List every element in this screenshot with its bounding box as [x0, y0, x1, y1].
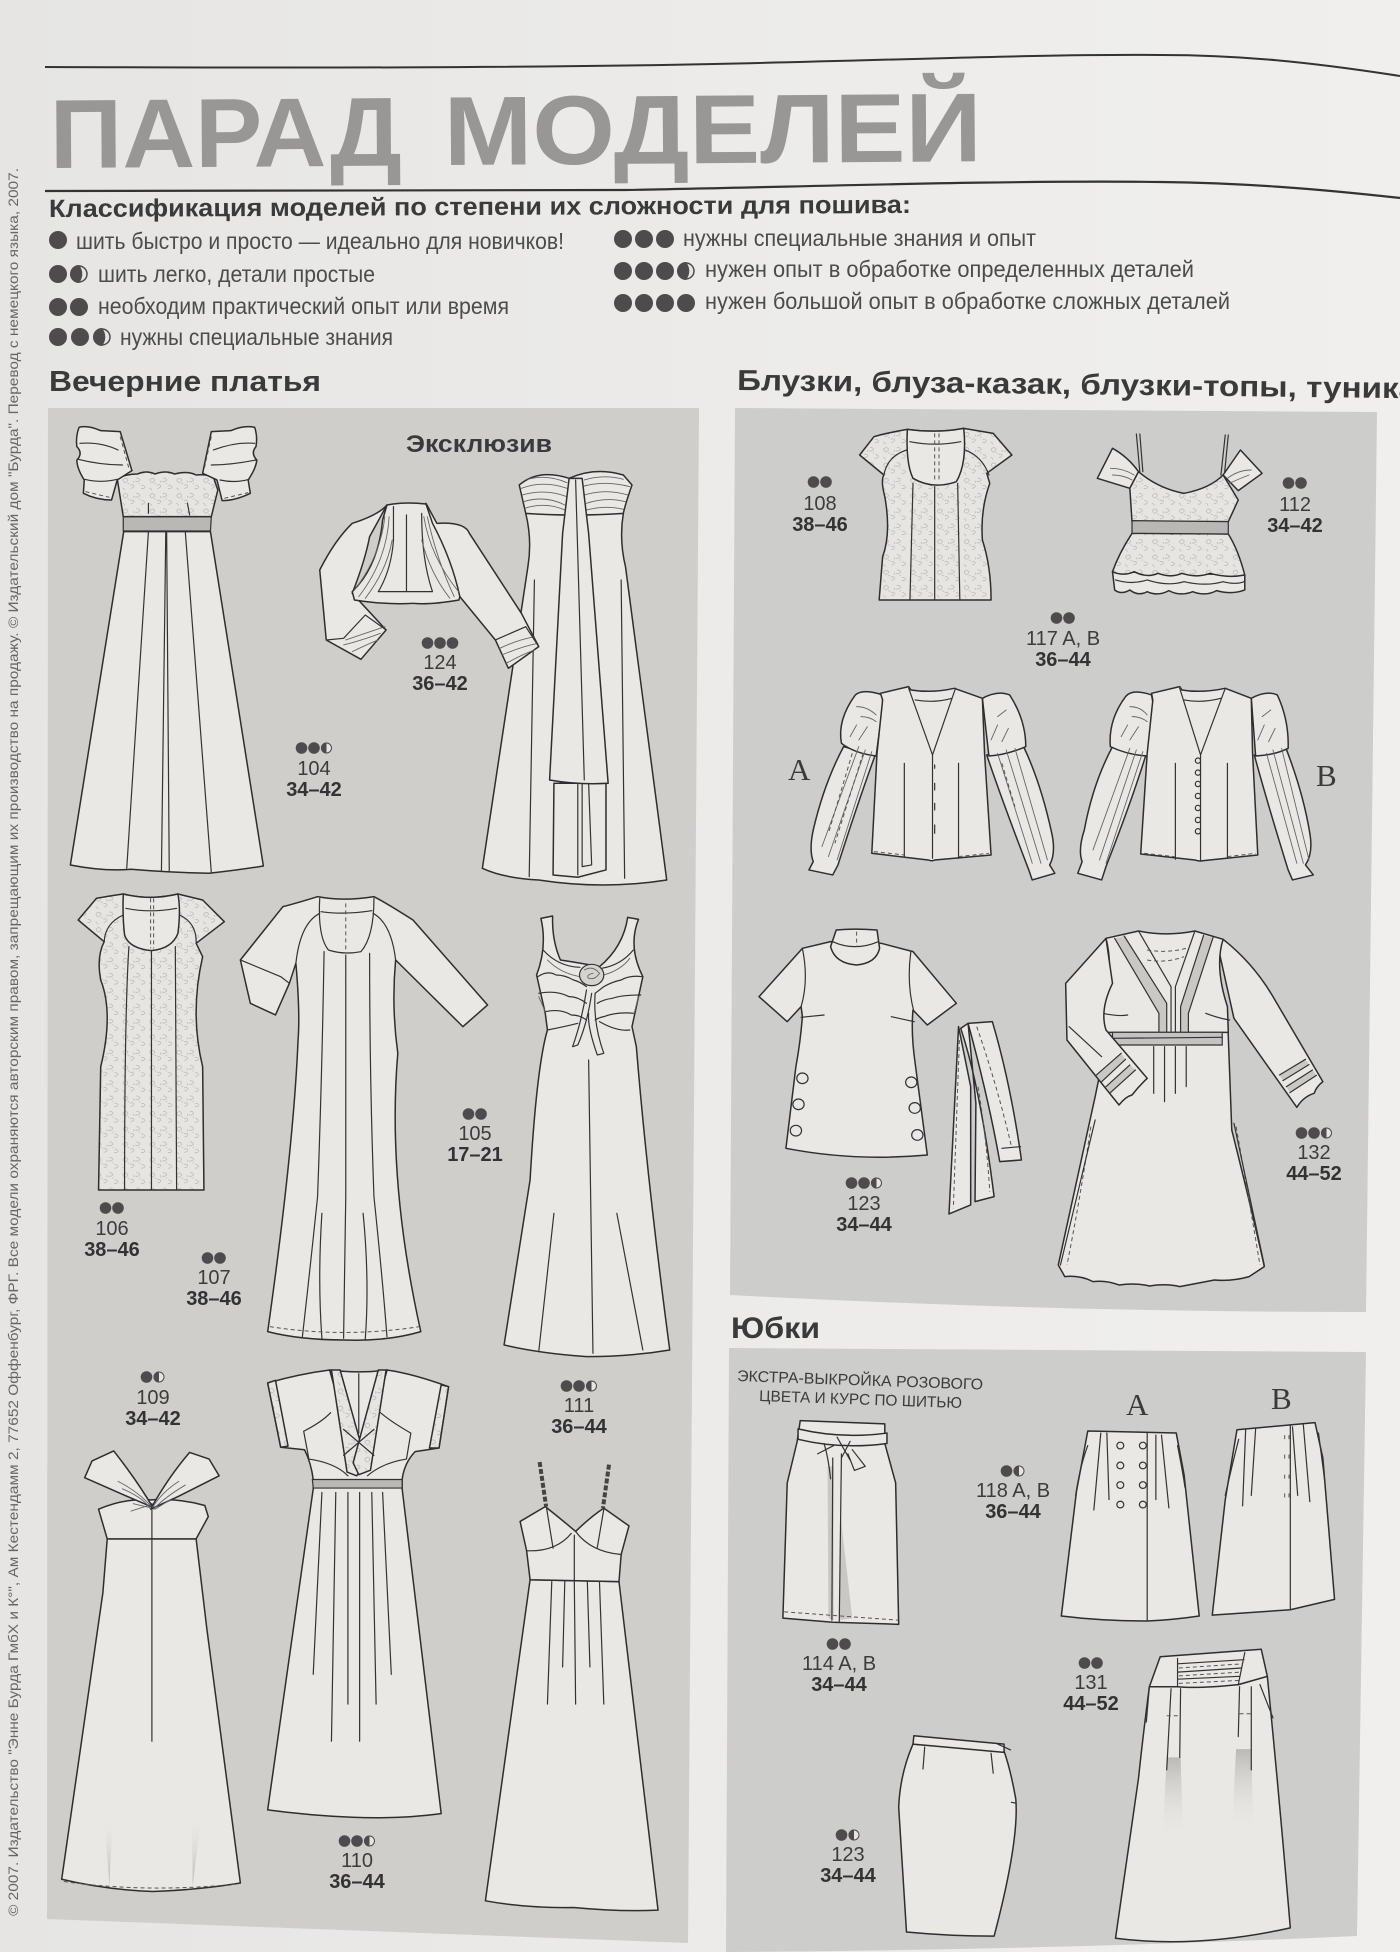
- garment: peplum top 112: [1097, 434, 1262, 594]
- label 110: 110: [341, 1850, 373, 1872]
- letter A on skirts: A: [1126, 1387, 1149, 1422]
- label 105: [447, 1108, 503, 1166]
- label 112: 34–42: [1267, 515, 1323, 537]
- label 111: 36–44: [551, 1416, 608, 1438]
- garment: pencil skirt 123: [899, 1736, 1016, 1936]
- label 109: 34–42: [125, 1408, 181, 1430]
- label 107: 107: [197, 1267, 231, 1289]
- label 124: 124: [423, 652, 457, 674]
- label 107: 38–46: [186, 1288, 242, 1310]
- legend row 2: шить легко, детали простые: [98, 261, 375, 287]
- label 117 A, B: 117 A, B: [1026, 628, 1100, 650]
- label 132: 132: [1297, 1142, 1331, 1164]
- label 132: 44–52: [1286, 1163, 1342, 1185]
- label 109: [125, 1371, 181, 1430]
- letter B on skirts: B: [1271, 1381, 1292, 1416]
- legend: complexity levels: [49, 225, 1230, 350]
- garment: lace top 108: [860, 428, 1012, 600]
- garment: bolero 124: [320, 503, 539, 668]
- label 108: 108: [803, 493, 837, 515]
- garment: long sleeve gown 107: [240, 897, 488, 1340]
- heading: skirts: Юбки: [731, 1312, 820, 1345]
- legend row 6: нужен опыт в обработке определенных деталей: [705, 256, 1194, 282]
- letter A: A: [788, 752, 811, 787]
- label 108: 38–46: [792, 514, 848, 536]
- label 132: [1286, 1127, 1342, 1185]
- garment: belt: [949, 1022, 1021, 1214]
- label 123 tunic: 34–44: [836, 1214, 893, 1236]
- heading: blouses: Блузки, блуза-казак, блузки-топы, туника: [737, 365, 1400, 405]
- legend row 4: нужны специальные знания: [120, 324, 393, 350]
- label 124: 36–42: [412, 673, 468, 695]
- letter B: B: [1316, 758, 1337, 793]
- label 118 A, B: [976, 1465, 1050, 1523]
- legend row 3: необходим практический опыт или время: [98, 293, 509, 319]
- label 107: [186, 1252, 242, 1310]
- label 105: 17–21: [447, 1144, 503, 1166]
- heading: evening dresses: Вечерние платья: [49, 366, 321, 398]
- label 117 A, B: 36–44: [1035, 649, 1092, 671]
- label 112: [1267, 477, 1323, 537]
- panel: blouses: [730, 408, 1377, 1312]
- label 131: [1063, 1657, 1119, 1715]
- title: МОДЕЛЕЙ: [443, 72, 982, 186]
- garment: dress 104: [70, 427, 263, 873]
- label 104: 104: [297, 758, 331, 780]
- label 106: 38–46: [84, 1239, 140, 1261]
- note: extra pattern: ЭКСТРА-ВЫКРОЙКА РОЗОВОГО: [737, 1367, 983, 1394]
- garment: ruffled gown 105: [504, 916, 670, 1357]
- garment: draped gown: [482, 472, 667, 885]
- label 124: [412, 637, 468, 695]
- label 110: [329, 1835, 386, 1893]
- panel: evening dresses: [47, 408, 699, 1943]
- panel: skirts: [726, 1348, 1366, 1952]
- label 123 tunic: 123: [847, 1193, 881, 1215]
- label 111: 111: [564, 1395, 594, 1417]
- title rule top: [45, 55, 1400, 76]
- label 111: [551, 1380, 608, 1438]
- garment: blouse 117 B: [1078, 687, 1313, 880]
- label 118 A, B: 36–44: [985, 1501, 1042, 1523]
- garment: tunic 123: [759, 929, 956, 1157]
- label 104: 34–42: [286, 779, 342, 801]
- legend row 7: нужен большой опыт в обработке сложных деталей: [705, 288, 1230, 314]
- label 131: 44–52: [1063, 1693, 1119, 1715]
- label 114 A, B: 34–44: [811, 1674, 868, 1696]
- label 112: 112: [1279, 494, 1311, 516]
- garment: skirt 114: [783, 1421, 899, 1624]
- title: [49, 72, 982, 189]
- garment: skirt 118 A: [1061, 1431, 1199, 1621]
- legend row 5: нужны специальные знания и опыт: [683, 225, 1036, 251]
- garment: dress 132: [1058, 931, 1323, 1287]
- label 118 A, B: 118 A, B: [976, 1480, 1050, 1502]
- garment: strap gown 111: [485, 1462, 658, 1911]
- garment: blouse 117 A: [809, 687, 1055, 880]
- note: extra pattern: ЦВЕТА И КУРС ПО ШИТЬЮ: [759, 1388, 962, 1412]
- label 114 A, B: [802, 1638, 876, 1696]
- label 114 A, B: 114 A, B: [802, 1653, 876, 1675]
- label 105: 105: [458, 1123, 492, 1145]
- legend row 1: шить быстро и просто — идеально для новичков!: [76, 228, 564, 254]
- title rule bottom: [45, 182, 1400, 198]
- label 117 A, B: [1026, 612, 1100, 671]
- label 104: [286, 742, 342, 801]
- label 123 skirt: [820, 1829, 877, 1887]
- label 110: 36–44: [329, 1871, 386, 1893]
- garment: lace dress 106: [78, 894, 224, 1190]
- garment: kimono sleeve gown 110: [268, 1370, 449, 1818]
- garment: twist gown 109: [62, 1451, 240, 1892]
- label 123 tunic: [836, 1177, 893, 1236]
- title: ПАРАД: [49, 77, 402, 189]
- garment: skirt 131: [1116, 1649, 1290, 1942]
- label 106: [84, 1202, 140, 1261]
- label 109: 109: [136, 1387, 170, 1409]
- classification heading: Классификация моделей по степени их сложности для пошива:: [49, 191, 911, 223]
- side copyright text: © 2007. Издательство "Энне Бурда ГмбХ и К°", Ам Кестендамм 2, 77652 Оффенбург, ФРГ. Все модели охраняются авторским правом, запрещающим их производство на продажу. © Издательский дом "Бурда". Перевод с немецкого языка, 2007.: [5, 168, 21, 1916]
- exclusive label: Эксклюзив: [406, 431, 552, 458]
- note: extra pattern: [737, 1367, 983, 1412]
- label 123 skirt: 123: [831, 1844, 865, 1866]
- garment: skirt 118 B: [1212, 1423, 1335, 1615]
- label 106: 106: [95, 1218, 129, 1240]
- label 123 skirt: 34–44: [820, 1865, 877, 1887]
- label 131: 131: [1074, 1672, 1108, 1694]
- label 108: [792, 476, 848, 536]
